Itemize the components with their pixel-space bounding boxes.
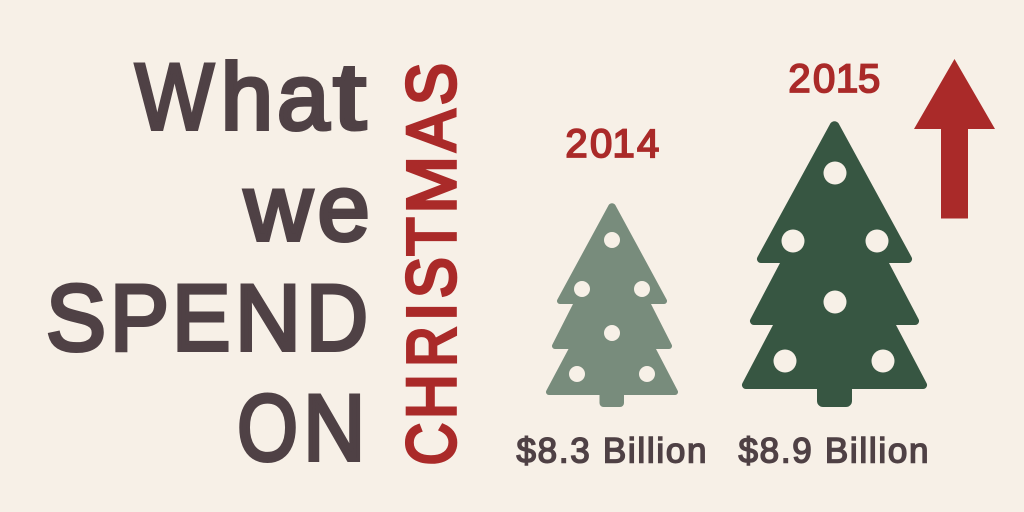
title word: ON: [237, 375, 365, 480]
title word: ON: N: [303, 375, 365, 480]
title word: CHRISTMAS, rotated: A: [393, 110, 470, 151]
arrow: upward increase: [914, 59, 995, 218]
value label: $8.3 Billion: $8.3 Billion: [516, 431, 706, 470]
title word: What: t: [333, 44, 366, 149]
icon: tree 2014: [546, 203, 678, 407]
title word: SPEND: S: [46, 265, 106, 370]
title word: we: e: [318, 155, 370, 260]
title word: What: a: [277, 44, 330, 149]
title word: CHRISTMAS, rotated: [393, 63, 470, 465]
title word: CHRISTMAS, rotated: I: [393, 302, 470, 322]
title word: SPEND: [46, 265, 368, 370]
title word: What: h: [221, 44, 273, 149]
title word: CHRISTMAS, rotated: T: [393, 217, 470, 256]
value label: $8.9 Billion: $8.9 Billion: [738, 431, 928, 470]
year label: 2014: 2014: [565, 122, 659, 166]
title word: we: w: [243, 155, 313, 260]
title word: CHRISTMAS, rotated: R: [393, 326, 470, 367]
title word: CHRISTMAS, rotated: S: [393, 63, 470, 105]
title word: SPEND: P: [110, 265, 169, 370]
title word: CHRISTMAS, rotated: S: [393, 257, 470, 298]
title word: CHRISTMAS, rotated: M: [393, 156, 470, 214]
title word: SPEND: N: [235, 265, 301, 370]
icon: tree 2015: [742, 121, 927, 407]
title word: What: [135, 44, 366, 149]
title word: CHRISTMAS, rotated: H: [393, 374, 470, 419]
title word: SPEND: D: [306, 265, 368, 370]
title word: SPEND: E: [172, 265, 230, 370]
title word: we: [243, 155, 370, 260]
title: What we SPEND ON: [46, 44, 370, 480]
title word: CHRISTMAS, rotated: C: [393, 423, 470, 465]
title word: ON: O: [237, 375, 298, 480]
title word: What: W: [135, 44, 214, 149]
year label: 2015: 2015: [788, 57, 880, 101]
